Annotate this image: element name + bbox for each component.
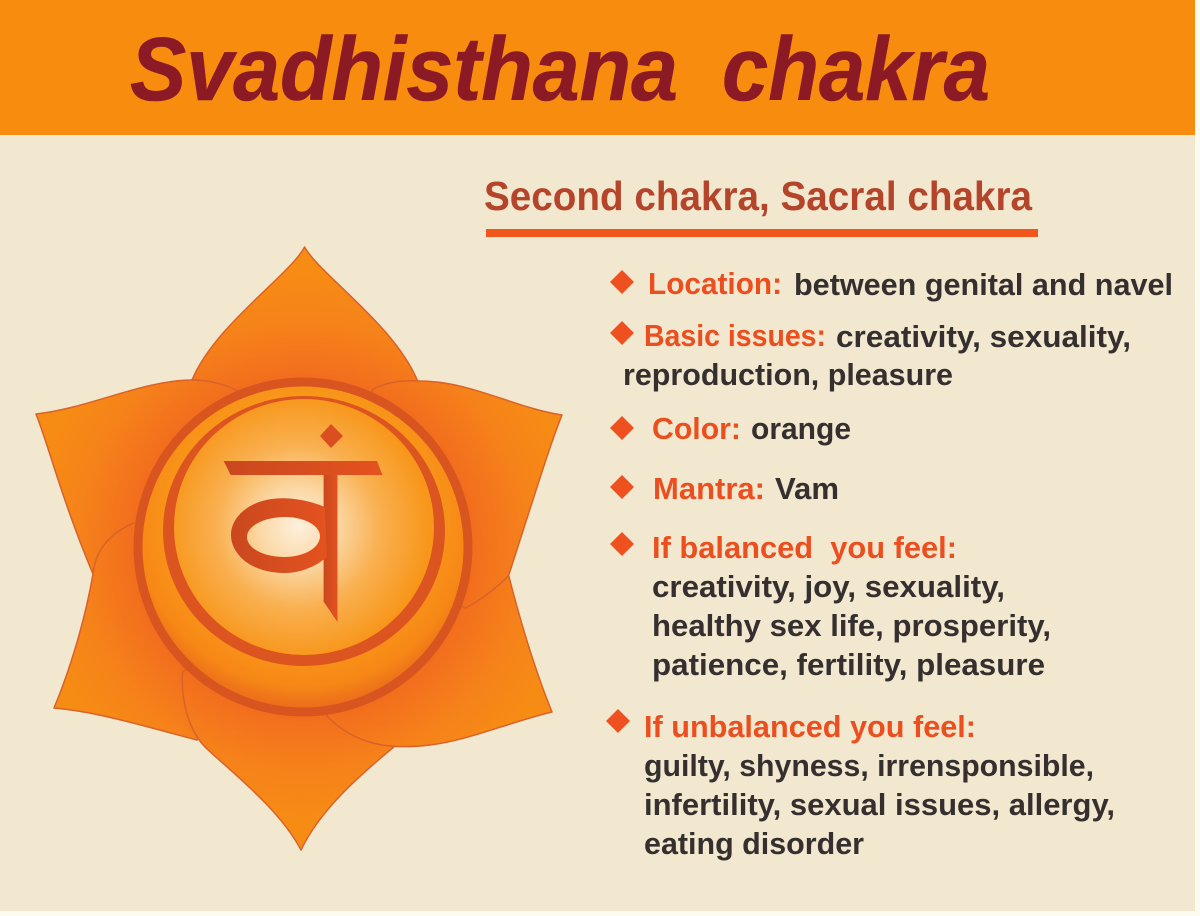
- item: mantra: Mantra:: [653, 471, 765, 506]
- item: mantra: Vam: [775, 471, 839, 506]
- outer ring: [138, 382, 468, 712]
- petal: upper left: [36, 380, 300, 574]
- item: color: orange: [751, 411, 851, 446]
- subtitle heading: Second chakra, Sacral chakra: [484, 173, 1033, 219]
- item: mantra: [610, 471, 839, 506]
- petal: lower left: [54, 523, 300, 740]
- item: if balanced: If balanced you feel:: [652, 530, 957, 565]
- title: chakra: [722, 20, 990, 120]
- item: location: [610, 266, 1173, 302]
- item: basic issues: creativity, sexuality,: [836, 319, 1131, 354]
- title: Svadhisthana: [130, 20, 678, 120]
- item: if unbalanced: infertility, sexual issues, allergy,: [644, 787, 1115, 822]
- title banner: [0, 0, 1195, 135]
- item: if balanced: healthy sex life, prosperity,: [652, 608, 1051, 643]
- item: if balanced: patience, fertility, pleasure: [652, 647, 1045, 682]
- item: color: Color:: [652, 411, 741, 446]
- item: color: [610, 411, 851, 446]
- item: if unbalanced: If unbalanced you feel:: [644, 709, 976, 744]
- bindu diamond: [320, 424, 343, 448]
- petal: lower right: [300, 540, 552, 747]
- inner ring: [168, 401, 440, 661]
- item: location: between genital and navel: [794, 267, 1173, 302]
- item: basic issues: [610, 318, 1131, 392]
- chakra lotus symbol: [36, 247, 562, 850]
- item: basic issues: reproduction, pleasure: [623, 357, 953, 392]
- item: if balanced: [610, 530, 1051, 682]
- item: if unbalanced: eating disorder: [644, 826, 864, 861]
- item: if unbalanced: [606, 709, 1115, 861]
- item: if balanced: creativity, joy, sexuality,: [652, 569, 1005, 604]
- item: if unbalanced: guilty, shyness, irrensponsible,: [644, 748, 1094, 783]
- petal: upper right: [300, 381, 562, 608]
- item: basic issues: Basic issues:: [644, 318, 826, 353]
- inner disc: [174, 399, 434, 655]
- subtitle underline: [486, 229, 1038, 237]
- item: location: Location:: [648, 266, 782, 301]
- petal: top: [192, 247, 418, 540]
- petal: bottom: [182, 600, 395, 850]
- vam glyph: [224, 461, 382, 622]
